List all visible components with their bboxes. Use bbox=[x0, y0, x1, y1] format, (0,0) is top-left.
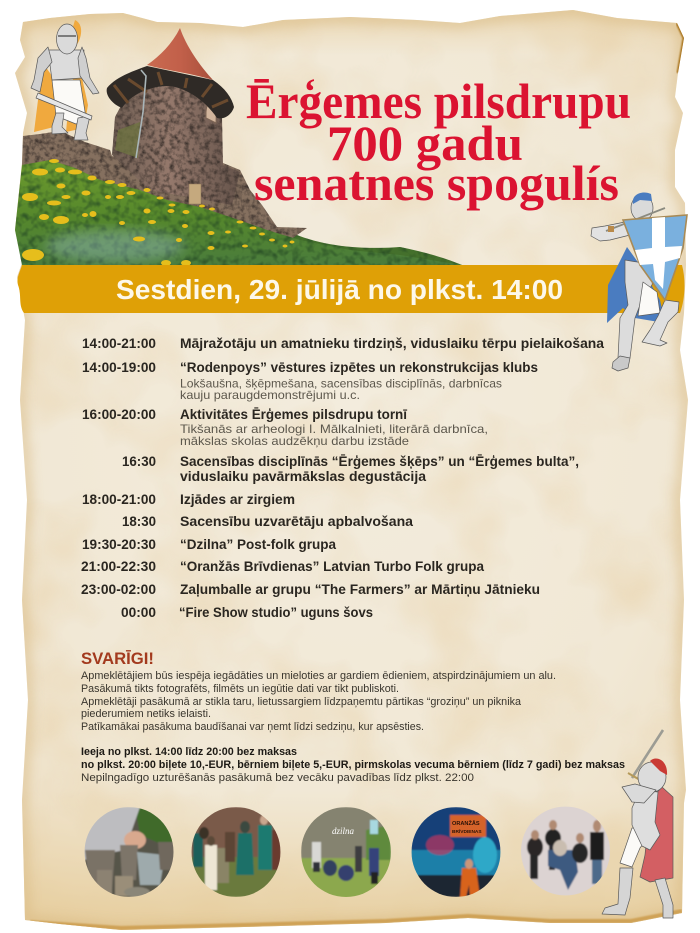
row: Rodenpoys: 14:00-19:00 bbox=[82, 360, 156, 375]
row: Rodenpoys: “Rodenpoys” vēstures izpētes un rekonstrukcijas klubs bbox=[180, 360, 538, 375]
wooden door bbox=[189, 184, 201, 204]
stone wall bbox=[22, 131, 307, 240]
photo: Oranžās Brīvdienas on stage: BRĪVDIENAS bbox=[452, 828, 482, 835]
ticket information: no plkst. 20:00 biļete 10,-EUR, bērniem biļete 5,-EUR, pirmskolas vecuma bērniem (līdz 7 gadi) bez maksas bbox=[81, 759, 625, 771]
row: awards: 18:30 bbox=[122, 514, 156, 529]
photo: Dzilna band bbox=[301, 807, 391, 898]
title bbox=[246, 73, 631, 211]
castle ruin with tower bbox=[22, 28, 307, 240]
tower body bbox=[112, 85, 240, 205]
important notes: Apmeklētāji pasākumā ar stikla taru, lietussargiem līdzpaņemtu pārtikas “groziņu” un piknika bbox=[81, 696, 521, 708]
important notes: piederumiem netiks ielaisti. bbox=[81, 708, 211, 720]
title: Ērģemes pilsdrupu bbox=[246, 73, 631, 129]
dandelions bbox=[22, 159, 294, 266]
tower window bbox=[206, 101, 216, 123]
row: competitions bbox=[122, 454, 579, 484]
photo: pottery bbox=[84, 807, 175, 897]
title: 700 gadu bbox=[327, 115, 523, 171]
icon: knight top left bbox=[31, 20, 99, 140]
photo: Oranžās Brīvdienas on stage: ORANŽĀS bbox=[452, 819, 480, 827]
roof rafters bbox=[114, 72, 228, 107]
title: senatnes spogulís bbox=[254, 155, 619, 211]
row: awards: Sacensību uzvarētāju apbalvošana bbox=[180, 514, 414, 529]
grass slope bbox=[15, 160, 462, 265]
gutter pipe bbox=[136, 70, 146, 158]
roof eaves bbox=[107, 66, 234, 118]
ticket information bbox=[81, 746, 625, 784]
icon: knight bottom right bbox=[602, 730, 673, 918]
important notes: Pasākumā tikts fotografēts, filmēts un iegūtie dati var tikt publiskoti. bbox=[81, 683, 399, 695]
important notes: Apmeklētājiem būs iespēja iegādāties un mieloties ar gardiem ēdieniem, atspirdzinājumiem un alu. bbox=[81, 670, 556, 682]
row: Dzilna: 19:30-20:30 bbox=[82, 537, 156, 552]
row: competitions: 16:30 bbox=[122, 454, 156, 469]
photo: reenactors bbox=[191, 807, 281, 897]
row: tower activities: Tikšanās ar arheologi I. Mālkalnieti, literārā darbnīca, bbox=[180, 423, 488, 436]
photo: Dzilna band: dzilna bbox=[332, 826, 355, 836]
ticket information: Ieeja no plkst. 14:00 līdz 20:00 bez maksas bbox=[81, 746, 297, 758]
schedule bbox=[81, 336, 605, 620]
row: fire show: “Fire Show studio” uguns šovs bbox=[179, 605, 373, 620]
row: tower activities bbox=[82, 407, 488, 448]
photo: The Farmers band bbox=[520, 806, 611, 896]
important notes bbox=[81, 670, 556, 733]
distant green hill bbox=[290, 232, 462, 265]
row: Dzilna: “Dzilna” Post-folk grupa bbox=[180, 537, 337, 552]
row: horses: 18:00-21:00 bbox=[82, 492, 156, 507]
forget-me-not haze bbox=[45, 230, 185, 262]
row: Oranžās Brīvdienas: “Oranžās Brīvdienas” Latvian Turbo Folk grupa bbox=[180, 559, 485, 574]
row: tower activities: Aktivitātes Ērģemes pilsdrupu tornī bbox=[180, 407, 407, 422]
moss patch bbox=[115, 122, 140, 158]
row: Rodenpoys: Lokšaušna, šķēpmešana, sacensības disciplīnās, darbnīcas bbox=[180, 378, 502, 390]
row: tower activities: mākslas skolas audzēkņu darbu izstāde bbox=[180, 435, 409, 448]
row: market: 14:00-21:00 bbox=[82, 336, 156, 351]
photo: Oranžās Brīvdienas on stage bbox=[411, 807, 501, 897]
important notes: Patīkamākai pasākuma baudīšanai var ņemt līdzi sedziņu, kur apsēsties. bbox=[81, 721, 424, 733]
row: Rodenpoys: kauju paraugdemonstrējumi u.c. bbox=[180, 389, 360, 402]
dandelion meadow bbox=[15, 159, 462, 266]
ticket information: Nepilngadīgo uzturēšanās pasākumā bez vecāku pavadības līdz plkst. 22:00 bbox=[81, 772, 474, 784]
row: competitions: Sacensības disciplīnās “Ērģemes šķēps” un “Ērģemes bulta”, bbox=[180, 454, 579, 469]
date banner bbox=[17, 265, 684, 313]
row: Dzilna bbox=[82, 537, 337, 552]
date banner: Sestdien, 29. jūlijā no plkst. 14:00 bbox=[116, 274, 563, 305]
row: tower activities: 16:00-20:00 bbox=[82, 407, 156, 422]
icon: knight with shield bbox=[591, 192, 687, 371]
row: Rodenpoys bbox=[82, 360, 538, 402]
heading: important: SVARĪGI! bbox=[81, 649, 154, 668]
row: market: Mājražotāju un amatnieku tirdziņš, viduslaiku tērpu pielaikošana bbox=[180, 336, 605, 351]
row: horses bbox=[82, 492, 295, 507]
row: fire show: 00:00 bbox=[121, 605, 156, 620]
row: horses: Izjādes ar zirgiem bbox=[180, 492, 295, 507]
row: The Farmers: 23:00-02:00 bbox=[81, 582, 156, 597]
row: competitions: viduslaiku pavārmākslas degustācija bbox=[180, 469, 427, 484]
conical roof bbox=[147, 28, 213, 80]
row: Oranžās Brīvdienas: 21:00-22:30 bbox=[81, 559, 156, 574]
row: The Farmers: Zaļumballe ar grupu “The Farmers” ar Mārtiņu Jātnieku bbox=[180, 582, 540, 597]
